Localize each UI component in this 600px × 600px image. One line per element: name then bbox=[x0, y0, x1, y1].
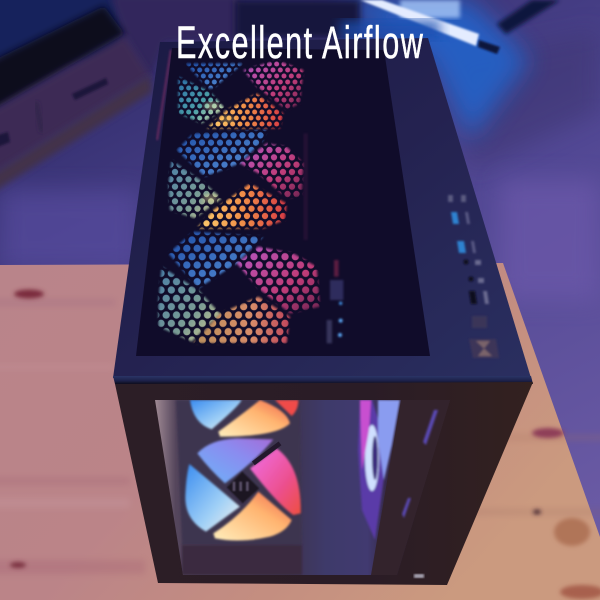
lower side fan bbox=[197, 438, 273, 483]
furniture at top left bbox=[0, 0, 240, 194]
glass window bbox=[155, 400, 450, 575]
wooden table bbox=[0, 263, 600, 600]
upper side fan bbox=[190, 400, 242, 429]
title: Excellent Airflow bbox=[176, 18, 423, 69]
lid lip bbox=[113, 376, 533, 384]
RGB fan 3 behind mesh bbox=[158, 133, 343, 343]
light bar at top right bbox=[235, 0, 560, 140]
mesh panel bbox=[136, 48, 430, 356]
pink reflection on lid edge bbox=[157, 50, 171, 140]
case divider bbox=[371, 400, 450, 575]
fan bracket bbox=[176, 400, 302, 545]
wood grain bands bbox=[0, 300, 600, 574]
fan hub bbox=[227, 472, 259, 503]
fans behind glass bbox=[176, 400, 450, 575]
top panel bbox=[113, 38, 531, 378]
brand logo bbox=[414, 574, 424, 578]
interior LED strip bbox=[327, 260, 343, 343]
wood knots bbox=[10, 290, 600, 599]
rear fan glow bbox=[358, 400, 400, 540]
front face bbox=[115, 382, 533, 585]
RGB fan 2 behind mesh bbox=[168, 130, 303, 228]
PC case bbox=[113, 38, 533, 585]
front I/O ports bbox=[448, 195, 499, 358]
RGB fan 1 behind mesh bbox=[178, 60, 303, 128]
